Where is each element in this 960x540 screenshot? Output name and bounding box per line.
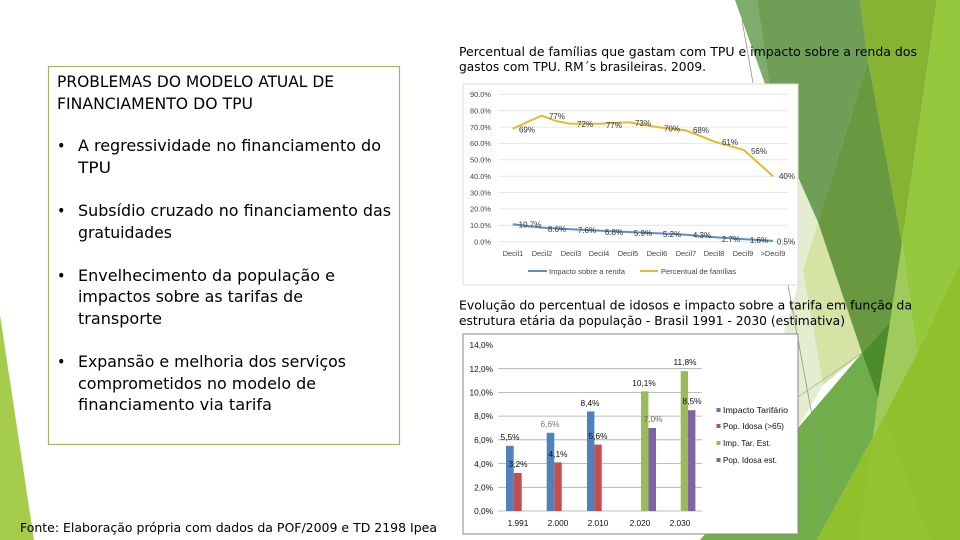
data labels: impacto: 0.5%: [777, 238, 795, 246]
data labels: 5,6%: [589, 431, 608, 441]
caption: chart 2: estrutura etária da população - Brasil 1991 - 2030 (estimativa): [459, 313, 845, 328]
y axis labels: 10,0%: [469, 388, 494, 398]
x axis labels: [503, 249, 785, 258]
bars: impacto tarifario estimado: [641, 371, 688, 511]
x axis labels: Decil2: [532, 249, 552, 258]
y axis labels: 70.0%: [470, 123, 491, 132]
bullet: envelhecimento: [57, 266, 335, 328]
x axis labels: >Decil9: [761, 249, 785, 258]
x axis labels: Decil7: [676, 249, 696, 258]
bars: populacao idosa: [514, 445, 602, 511]
caption: chart 1: [459, 44, 917, 74]
bullet: regressividade: TPU: [77, 158, 111, 177]
bullet: subsidio cruzado: [57, 201, 391, 242]
x axis labels: Decil6: [647, 249, 667, 258]
data labels: familias: 70%: [664, 124, 680, 134]
bars: impacto tarifario: [506, 411, 594, 511]
x axis labels: Decil1: [503, 249, 523, 258]
y axis labels: 4,0%: [474, 459, 494, 469]
data labels: familias: 69%: [519, 126, 535, 134]
data labels: impacto: 1.6%: [750, 236, 768, 245]
y axis labels: 60.0%: [470, 139, 491, 148]
legend: [528, 267, 736, 276]
caption: chart 2: Evolução do percentual de idosos e impacto sobre a tarifa em função da: [459, 298, 912, 312]
bullet: subsidio cruzado: •: [57, 201, 66, 220]
x axis labels: Decil3: [561, 249, 581, 258]
y axis labels: [469, 340, 494, 516]
bullet: expansao: •: [57, 352, 66, 371]
data labels: familias: 77%: [606, 121, 622, 130]
y axis labels: 40.0%: [470, 172, 491, 181]
bullet: expansao: comprometidos no modelo de: [78, 374, 316, 393]
y axis labels: 90.0%: [470, 90, 491, 99]
y axis labels: 20.0%: [470, 204, 491, 214]
y axis labels: 10.0%: [470, 221, 491, 230]
bullet: regressividade: A regressividade no financiamento do: [78, 136, 381, 155]
heading: FINANCIAMENTO DO TPU: [57, 94, 253, 113]
data labels: 11,8%: [674, 357, 697, 367]
data labels: impacto: 2.7%: [722, 235, 740, 244]
legend: Pop. Idosa est.: [723, 455, 777, 465]
bars: populacao idosa estimada: [648, 410, 695, 511]
y axis labels: 14,0%: [469, 340, 494, 350]
bullet: regressividade: •: [57, 136, 66, 155]
x axis labels: Decil8: [704, 249, 724, 258]
data labels: 8,4%: [581, 398, 600, 408]
y axis labels: 2,0%: [474, 482, 494, 492]
bullet: envelhecimento: Envelhecimento da população e: [78, 266, 335, 285]
data labels: impacto: 5.2%: [663, 230, 681, 239]
line chart: families and income impact by decile: [463, 84, 798, 285]
data labels: impacto: [519, 220, 795, 246]
bullet: expansao: Expansão e melhoria dos serviços: [78, 352, 346, 371]
y axis labels: [470, 90, 491, 246]
data labels: 3,2%: [509, 459, 528, 469]
heading: [57, 72, 334, 113]
data labels: impacto: 10.7%: [519, 220, 541, 230]
y axis labels: 50.0%: [470, 156, 491, 164]
data labels: 7,0%: [644, 414, 663, 424]
y axis labels: 8,0%: [474, 411, 494, 421]
data labels: familias: 77%: [549, 112, 565, 121]
y axis labels: 0.0%: [474, 238, 491, 246]
data labels: impacto: 6.8%: [605, 228, 623, 237]
bullet: envelhecimento: impactos sobre as tarifas de: [78, 287, 303, 306]
y axis labels: 30.0%: [470, 188, 491, 198]
data labels: impacto: 5.9%: [634, 229, 652, 238]
y axis labels: 0,0%: [474, 506, 494, 516]
data labels: familias: 68%: [693, 126, 709, 135]
data labels: 4,1%: [549, 449, 568, 459]
data labels: impacto: 8.6%: [548, 225, 566, 234]
data labels: familias: 72%: [577, 120, 593, 129]
bullet: expansao: financiamento via tarifa: [78, 395, 272, 414]
data labels: 8,5%: [683, 396, 702, 406]
legend: Pop. Idosa (>65): [723, 421, 784, 431]
legend: Impacto Tarifário: [723, 405, 788, 415]
data labels: familias: 73%: [635, 119, 651, 128]
x axis labels: Decil9: [733, 249, 753, 258]
legend: Imp. Tar. Est.: [723, 438, 771, 448]
data labels: [501, 357, 702, 469]
data labels: familias: 40%: [779, 172, 795, 181]
data labels: familias: 56%: [751, 147, 767, 156]
bullet: envelhecimento: transporte: [78, 309, 162, 328]
data labels: familias: 61%: [722, 138, 738, 147]
source note: Fonte: Elaboração própria com dados da POF/2009 e TD 2198 Ipea: [20, 520, 437, 535]
legend: [716, 405, 788, 465]
data labels: impacto: 4.3%: [693, 231, 711, 240]
x axis labels: 2.020: [630, 518, 651, 528]
series: percentual de familias: [513, 116, 773, 176]
x axis labels: [508, 518, 691, 528]
data labels: familias: [519, 112, 795, 181]
data labels: 6,6%: [541, 419, 560, 429]
bar chart: tariff impact and elderly population: [463, 334, 798, 534]
data labels: 10,1%: [632, 378, 656, 388]
bullet: regressividade: [57, 136, 381, 177]
y axis labels: 12,0%: [469, 364, 494, 374]
bullet: subsidio cruzado: gratuidades: [78, 223, 172, 242]
series: impacto sobre a renda: [513, 224, 773, 241]
legend: Percentual de famílias: [661, 267, 736, 276]
data labels: 5,5%: [501, 432, 520, 442]
legend: Impacto sobre a renda: [549, 267, 626, 276]
data labels: impacto: 7.6%: [578, 226, 596, 235]
x axis labels: 1.991: [508, 518, 529, 528]
x axis labels: 2.030: [670, 518, 691, 528]
x axis labels: 2.000: [548, 518, 569, 528]
x axis labels: 2.010: [588, 518, 609, 528]
x axis labels: Decil5: [618, 249, 638, 258]
bullet: expansao: [57, 352, 346, 414]
heading: PROBLEMAS DO MODELO ATUAL DE: [57, 72, 334, 91]
bullet: subsidio cruzado: Subsídio cruzado no financiamento das: [78, 201, 391, 220]
caption: chart 1: gastos com TPU. RM´s brasileiras. 2009.: [459, 59, 706, 74]
y axis labels: 80.0%: [470, 106, 491, 116]
panel: problems of the current financing model: [48, 66, 400, 444]
x axis labels: Decil4: [589, 249, 609, 258]
y axis labels: 6,0%: [474, 435, 494, 445]
caption: chart 2: [459, 298, 912, 328]
caption: chart 1: Percentual de famílias que gastam com TPU e impacto sobre a renda dos: [459, 44, 917, 59]
bullet: envelhecimento: •: [57, 266, 66, 285]
